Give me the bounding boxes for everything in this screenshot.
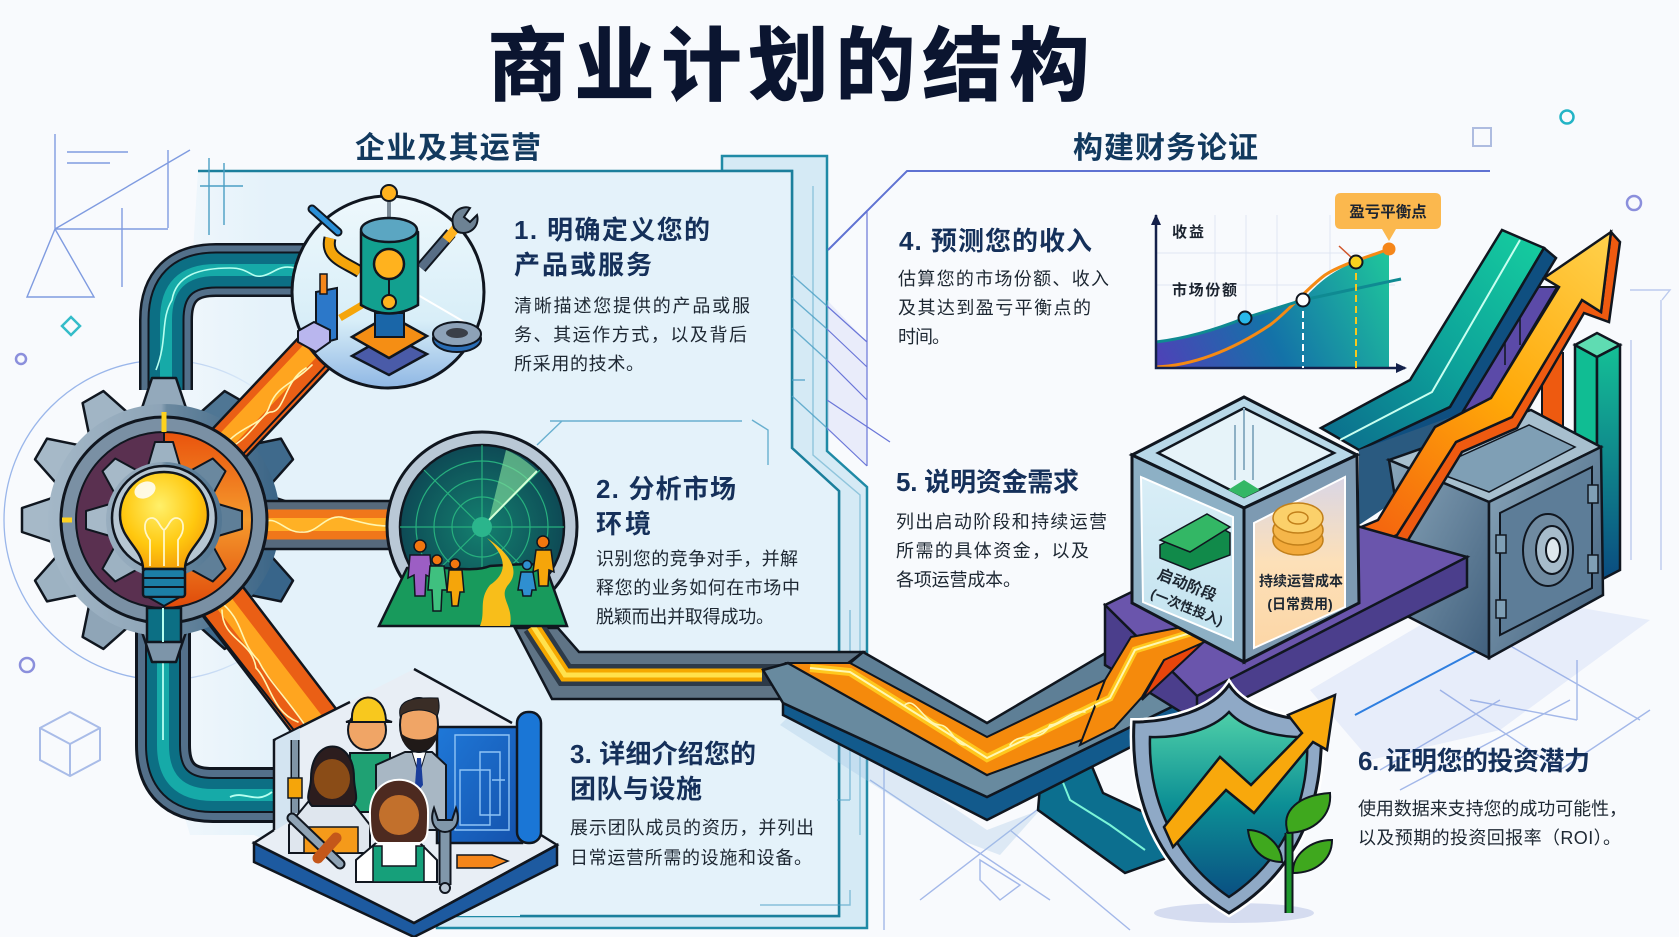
right section rule and hatch: [827, 171, 1490, 466]
text block 2: 识别您的竞争对手，并解: [596, 549, 798, 569]
diagonal energy pipe: [763, 620, 1192, 873]
callout: break-even point: [1335, 193, 1441, 241]
text block 4: 时间。: [898, 327, 950, 347]
text block 5: 各项运营成本。: [896, 570, 1021, 590]
text block 3: 展示团队成员的资历，并列出: [570, 818, 814, 838]
text block 1: [514, 215, 750, 374]
text block 1: 1. 明确定义您的: [514, 215, 710, 245]
purple platform: [1105, 510, 1467, 722]
text block 1: 产品或服务: [514, 250, 652, 280]
icon: coin stack: [1273, 503, 1323, 555]
glass cube with funding labels: [1132, 397, 1359, 662]
text block 5: 列出启动阶段和持续运营: [896, 512, 1107, 532]
text block 3: [570, 739, 814, 868]
orange pipe to radar: [225, 501, 393, 549]
decorative shapes, top right: [1473, 110, 1670, 570]
text block 2: 脱颖而出并取得成功。: [596, 607, 774, 627]
text block 4: 估算您的市场份额、收入: [898, 269, 1109, 289]
icon: steel safe: [1389, 410, 1603, 658]
decorative blueprint shapes, left: [4, 134, 324, 776]
orange rising arrow: [1359, 232, 1620, 568]
text block 2: 释您的业务如何在市场中: [596, 578, 800, 598]
text block 6: 使用数据来支持您的成功可能性，: [1358, 799, 1627, 819]
text block 5: 所需的具体资金，以及: [896, 541, 1089, 561]
text block 5: 5. 说明资金需求: [896, 467, 1079, 497]
teal pipe, upper: [156, 267, 305, 390]
teal pipe, lower: [163, 590, 280, 798]
panel: business and operations: [125, 171, 839, 916]
text block 4: 4. 预测您的收入: [899, 226, 1092, 256]
grid lines, lower right: [870, 590, 1650, 930]
break-even chart: 市场份额: [1172, 281, 1237, 299]
panel top rule: [198, 158, 860, 916]
icon: team in house: [254, 669, 557, 937]
break-even chart: 收益: [1172, 223, 1204, 241]
text block 5: [896, 467, 1107, 590]
label: startup stage: [1149, 564, 1225, 629]
text block 6: 6. 证明您的投资潜力: [1358, 746, 1590, 776]
break-even chart: [1151, 214, 1407, 373]
label: startup stage: 启动阶段: [1155, 564, 1220, 605]
gear teeth: [22, 378, 306, 662]
text block 3: 团队与设施: [570, 774, 702, 804]
icon: shield with growth arrow and plant: [1134, 685, 1335, 923]
heading: business and operations: 企业及其运营: [355, 132, 541, 165]
icon: market radar: [379, 432, 863, 699]
text block 2: 环境: [596, 509, 651, 539]
text block 3: 3. 详细介绍您的: [570, 739, 756, 769]
text block 2: [596, 474, 800, 627]
text block 3: 日常运营所需的设施和设备。: [570, 848, 812, 868]
label: ongoing cost: [1259, 573, 1343, 612]
label: ongoing cost: 持续运营成本: [1259, 573, 1343, 589]
panel: back frame: [437, 156, 867, 928]
icon: product machine in circle: [292, 185, 484, 388]
growth bars: [1542, 333, 1620, 582]
orange pipe to circle 1: [212, 351, 331, 466]
gear hub with light bulb: [61, 412, 267, 642]
orange pipe to team: [192, 578, 320, 738]
icon: cash stack: [1160, 514, 1230, 570]
callout: break-even point: 盈亏平衡点: [1349, 202, 1427, 221]
text block 2: 2. 分析市场: [596, 474, 736, 504]
label: startup stage: (一次性投入): [1149, 585, 1225, 629]
title: 商业计划的结构: [488, 22, 1096, 111]
text block 1: 务、其运作方式，以及背后: [514, 325, 747, 345]
text block 1: 所采用的技术。: [514, 354, 644, 374]
label: ongoing cost: (日常费用): [1267, 596, 1333, 612]
text block 1: 清晰描述您提供的产品或服: [514, 296, 750, 316]
orange pipe entering cube: [1080, 623, 1209, 745]
text block 6: 以及预期的投资回报率（ROI）。: [1358, 828, 1621, 848]
heading: building the financial case: 构建财务论证: [1073, 132, 1258, 165]
text block 6: [1358, 746, 1627, 848]
text block 4: 及其达到盈亏平衡点的: [898, 298, 1091, 318]
rising teal ribbon: [1321, 230, 1557, 525]
text block 4: [898, 226, 1109, 347]
